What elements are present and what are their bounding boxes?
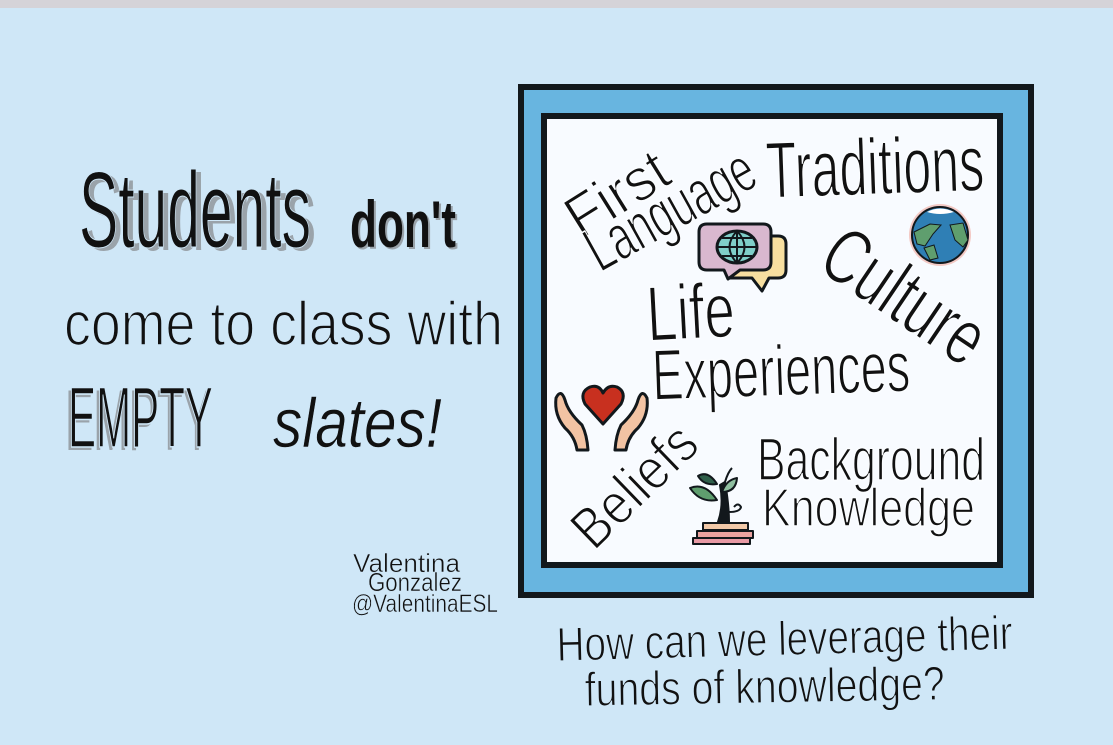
label: First Language: [552, 133, 768, 285]
label: Background Knowledge: Knowledge: [762, 478, 975, 538]
icon: plant on books: [690, 468, 753, 544]
question: funds of knowledge: [556, 607, 1013, 717]
text: EMPTY slates!: EMPTY: [68, 370, 213, 466]
text: EMPTY slates!: slates!: [273, 384, 442, 462]
label: Background Knowledge: [757, 426, 985, 538]
panel: framed slate: [521, 87, 1031, 595]
label: First Language: Language: [572, 133, 768, 285]
question: funds of knowledge: How can we leverage their: [556, 607, 1013, 672]
credit: author: Valentina: [353, 548, 461, 578]
label: Life Experiences: Life: [644, 265, 737, 358]
credit: author: Gonzalez: [368, 567, 462, 597]
heading: Students don't: don't: [352, 189, 458, 263]
label: Life Experiences: [644, 265, 911, 416]
label: Background Knowledge: Background: [757, 426, 985, 493]
label: First Language: First: [552, 136, 681, 251]
credit: author: [352, 548, 498, 618]
heading: Students don't: Students: [84, 152, 316, 273]
question: funds of knowledge: funds of knowledge?: [584, 658, 945, 717]
heading: Students don't: don't: [350, 187, 456, 261]
credit: author: @ValentinaESL: [352, 590, 498, 618]
icon: earth: [909, 204, 971, 266]
label: Life Experiences: Experiences: [651, 327, 911, 416]
label: Culture: Culture: [805, 208, 1004, 383]
icon: speech bubbles with globe: [699, 224, 786, 291]
label: Beliefs: Beliefs: [558, 410, 711, 561]
text: EMPTY slates!: EMPTY: [65, 373, 211, 469]
label: Traditions: Traditions: [764, 118, 985, 215]
text: come to class with: come to class with: [64, 290, 503, 359]
heading: Students don't: Students: [79, 149, 311, 270]
icon: hands holding heart: [556, 386, 647, 450]
